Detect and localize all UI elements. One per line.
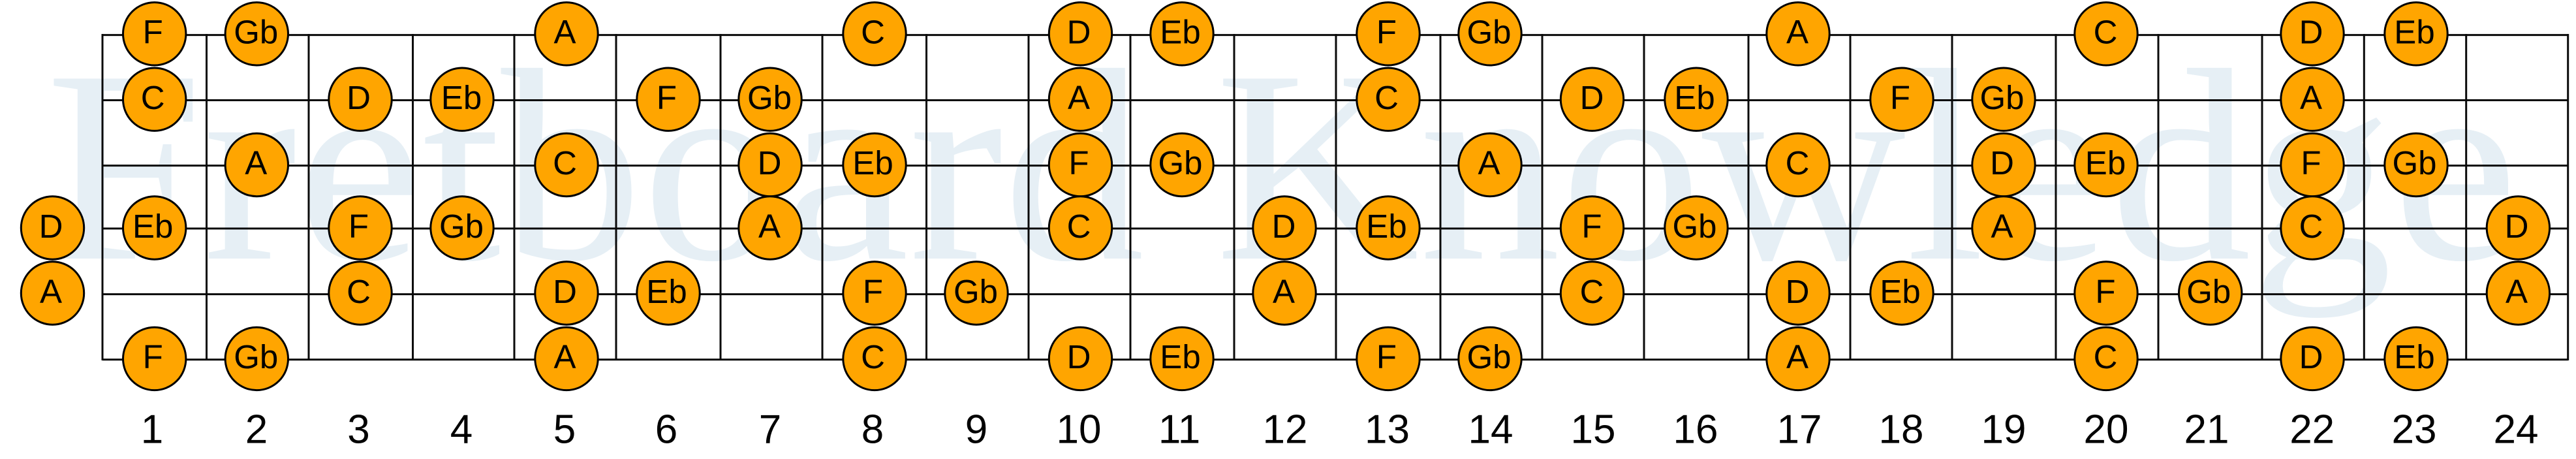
note F fret 22: F xyxy=(2301,144,2321,182)
note C fret 13 xyxy=(1357,68,1420,131)
note Gb fret 4: Gb xyxy=(439,208,484,245)
note F fret 1: F xyxy=(143,13,163,51)
note C fret 22 xyxy=(2281,197,2344,259)
note A fret 17 xyxy=(1767,327,1829,390)
fret numbers: 19 xyxy=(1981,407,2026,452)
note Gb fret 23: Gb xyxy=(2392,144,2437,182)
note A fret 22: A xyxy=(2300,79,2322,116)
fret numbers: 16 xyxy=(1673,407,1718,452)
note C fret 15: C xyxy=(1580,273,1604,310)
note Eb fret 23: Eb xyxy=(2394,338,2435,375)
note C fret 10 xyxy=(1049,197,1112,259)
note A fret 17: A xyxy=(1786,338,1808,375)
watermark: Fretboard Knowledge: Fretboard Knowledge xyxy=(46,14,2518,319)
note Gb fret 16: Gb xyxy=(1672,208,1717,245)
note Gb fret 11: Gb xyxy=(1158,144,1203,182)
note F fret 18 xyxy=(1870,68,1933,131)
note Eb fret 23: Eb xyxy=(2394,13,2435,51)
note D fret 19: D xyxy=(1990,144,2014,182)
fret numbers: 15 xyxy=(1571,407,1615,452)
note C fret 20: C xyxy=(2094,338,2117,375)
notes: string 5 xyxy=(21,262,2550,324)
note D fret 24: D xyxy=(2505,208,2528,245)
fret numbers: 4 xyxy=(450,407,473,452)
note Eb fret 23 xyxy=(2385,3,2447,65)
fret numbers: 3 xyxy=(347,407,370,452)
note A fret 24: A xyxy=(2506,273,2528,310)
note Eb fret 6 xyxy=(637,262,700,324)
note Eb fret 13 xyxy=(1357,197,1420,259)
note A fret 17: A xyxy=(1786,13,1808,51)
note A fret 7: A xyxy=(758,208,781,245)
note D fret 7: D xyxy=(758,144,781,182)
note Gb fret 2 xyxy=(225,327,288,390)
note Eb fret 6: Eb xyxy=(646,273,687,310)
note F fret 20: F xyxy=(2095,273,2116,310)
note Gb fret 14 xyxy=(1459,3,1521,65)
fret numbers: 24 xyxy=(2494,407,2538,452)
note F fret 8: F xyxy=(863,273,883,310)
note F fret 13 xyxy=(1357,3,1420,65)
note C fret 22: C xyxy=(2299,208,2323,245)
note D fret 10 xyxy=(1049,3,1112,65)
note A fret 12 xyxy=(1253,262,1316,324)
note Gb fret 21: Gb xyxy=(2186,273,2231,310)
note C fret 5 xyxy=(535,133,598,197)
note A open string: A xyxy=(40,273,62,310)
note F fret 10 xyxy=(1049,133,1112,197)
note F fret 8 xyxy=(843,262,906,324)
note Eb fret 8 xyxy=(843,133,906,197)
note A fret 5 xyxy=(535,3,598,65)
note Eb fret 18: Eb xyxy=(1880,273,1921,310)
note Eb fret 16: Eb xyxy=(1674,79,1715,116)
note Gb fret 14: Gb xyxy=(1466,13,1512,51)
note F fret 3 xyxy=(329,197,392,259)
note Gb fret 23 xyxy=(2385,133,2447,197)
note D fret 19 xyxy=(1972,133,2035,197)
note Eb fret 11 xyxy=(1151,327,1213,390)
note F fret 6 xyxy=(637,68,700,131)
note D fret 22: D xyxy=(2299,338,2323,375)
note C fret 17: C xyxy=(1786,144,1809,182)
note A fret 24 xyxy=(2487,262,2550,324)
fret numbers: 13 xyxy=(1365,407,1410,452)
fret numbers: 22 xyxy=(2289,407,2335,452)
note Gb fret 11 xyxy=(1151,133,1213,197)
note D fret 3 xyxy=(329,68,392,131)
note D fret 7 xyxy=(739,133,801,197)
fret numbers: 17 xyxy=(1777,407,1822,452)
fret numbers: 18 xyxy=(1879,407,1923,452)
notes: string 1 xyxy=(123,3,2447,65)
note Eb fret 1 xyxy=(123,197,186,259)
note C fret 3 xyxy=(329,262,392,324)
note Eb fret 16 xyxy=(1665,68,1728,131)
note F fret 13: F xyxy=(1376,338,1397,375)
fret numbers: 8 xyxy=(861,407,884,452)
note F fret 10: F xyxy=(1068,144,1089,182)
note Gb fret 2: Gb xyxy=(234,338,278,375)
note A fret 22 xyxy=(2281,68,2344,131)
notes: string 6 xyxy=(123,327,2447,390)
note D fret 5: D xyxy=(553,273,577,310)
fret numbers: 14 xyxy=(1468,407,1513,452)
note D fret 10: D xyxy=(1067,338,1091,375)
fret numbers: 9 xyxy=(965,407,987,452)
note A fret 10 xyxy=(1049,68,1112,131)
note D fret 12: D xyxy=(1272,208,1296,245)
note Gb fret 21 xyxy=(2179,262,2242,324)
note D fret 17 xyxy=(1767,262,1829,324)
note F fret 13: F xyxy=(1376,13,1397,51)
note Eb fret 20 xyxy=(2075,133,2137,197)
note C fret 1: C xyxy=(141,79,165,116)
note C fret 8 xyxy=(843,327,906,390)
note C fret 8: C xyxy=(861,338,885,375)
note C fret 17 xyxy=(1767,133,1829,197)
note F fret 13 xyxy=(1357,327,1420,390)
note Eb fret 4: Eb xyxy=(441,79,482,116)
note D fret 22: D xyxy=(2299,13,2323,51)
note F fret 1 xyxy=(123,3,186,65)
fret numbers: 12 xyxy=(1263,407,1307,452)
note C fret 3: C xyxy=(347,273,371,310)
fret numbers: 11 xyxy=(1158,407,1200,452)
fret numbers: 2 xyxy=(245,407,268,452)
note A fret 5: A xyxy=(553,338,576,375)
note Gb fret 14 xyxy=(1459,327,1521,390)
note Eb fret 11: Eb xyxy=(1160,338,1201,375)
note F fret 15: F xyxy=(1581,208,1602,245)
note F fret 20 xyxy=(2075,262,2137,324)
note D fret 3: D xyxy=(347,79,371,116)
note Gb fret 7: Gb xyxy=(747,79,792,116)
note Gb fret 4 xyxy=(431,197,493,259)
fret numbers: 6 xyxy=(655,407,677,452)
note C fret 20 xyxy=(2075,3,2137,65)
note Gb fret 2 xyxy=(225,3,288,65)
note Gb fret 9 xyxy=(945,262,1008,324)
note C fret 5: C xyxy=(553,144,577,182)
note Eb fret 13: Eb xyxy=(1366,208,1407,245)
note A fret 17 xyxy=(1767,3,1829,65)
note A fret 5 xyxy=(535,327,598,390)
fret numbers: 5 xyxy=(553,407,576,452)
note A open string xyxy=(21,262,84,324)
note D fret 10: D xyxy=(1067,13,1091,51)
note Eb fret 20: Eb xyxy=(2085,144,2126,182)
note A fret 19: A xyxy=(1991,208,2013,245)
note Gb fret 7 xyxy=(739,68,801,131)
note F fret 3: F xyxy=(349,208,369,245)
note Eb fret 23 xyxy=(2385,327,2447,390)
note D fret 22 xyxy=(2281,3,2344,65)
note A fret 14 xyxy=(1459,133,1521,197)
note D fret 12 xyxy=(1253,197,1316,259)
note C fret 15 xyxy=(1560,262,1624,324)
note Gb fret 16 xyxy=(1665,197,1728,259)
fret numbers: 10 xyxy=(1057,407,1101,452)
note F fret 15 xyxy=(1560,197,1624,259)
note A fret 7 xyxy=(739,197,801,259)
note D fret 22 xyxy=(2281,327,2344,390)
note Eb fret 11 xyxy=(1151,3,1213,65)
fret numbers: 7 xyxy=(759,407,781,452)
note A fret 19 xyxy=(1972,197,2035,259)
note A fret 2: A xyxy=(245,144,267,182)
note Eb fret 11: Eb xyxy=(1160,13,1201,51)
note F fret 1 xyxy=(123,327,186,390)
note C fret 10: C xyxy=(1067,208,1091,245)
note D fret 15: D xyxy=(1580,79,1604,116)
fret numbers xyxy=(141,407,2538,452)
note C fret 20 xyxy=(2075,327,2137,390)
note Gb fret 19 xyxy=(1972,68,2035,131)
note D fret 10 xyxy=(1049,327,1112,390)
note D fret 15 xyxy=(1560,68,1624,131)
note A fret 2 xyxy=(225,133,288,197)
note F fret 18: F xyxy=(1890,79,1910,116)
note Eb fret 8: Eb xyxy=(852,144,893,182)
note C fret 1 xyxy=(123,68,186,131)
notes: string 3 xyxy=(225,133,2447,197)
fret numbers: 20 xyxy=(2084,407,2128,452)
note F fret 22 xyxy=(2281,133,2344,197)
note A fret 12: A xyxy=(1273,273,1295,310)
note Eb fret 18 xyxy=(1870,262,1933,324)
note Eb fret 1: Eb xyxy=(132,208,173,245)
notes: string 4 xyxy=(21,197,2550,259)
notes: string 2 xyxy=(123,68,2344,131)
note F fret 1: F xyxy=(143,338,163,375)
note D fret 5 xyxy=(535,262,598,324)
note Gb fret 2: Gb xyxy=(234,13,278,51)
note Gb fret 19: Gb xyxy=(1979,79,2025,116)
note D open string: D xyxy=(39,208,63,245)
fret numbers: 21 xyxy=(2184,407,2229,452)
fret numbers: 23 xyxy=(2392,407,2436,452)
note D open string xyxy=(21,197,84,259)
note Gb fret 14: Gb xyxy=(1466,338,1512,375)
fret numbers: 1 xyxy=(141,407,163,452)
note F fret 6: F xyxy=(657,79,677,116)
note D fret 17: D xyxy=(1786,273,1809,310)
note C fret 20: C xyxy=(2094,13,2117,51)
note A fret 10: A xyxy=(1068,79,1090,116)
note D fret 24 xyxy=(2487,197,2550,259)
note C fret 8: C xyxy=(861,13,885,51)
note Gb fret 9: Gb xyxy=(954,273,998,310)
note A fret 14: A xyxy=(1478,144,1500,182)
note A fret 5: A xyxy=(553,13,576,51)
note C fret 8 xyxy=(843,3,906,65)
note Eb fret 4 xyxy=(431,68,493,131)
note C fret 13: C xyxy=(1374,79,1399,116)
strings and frets grid xyxy=(102,34,2568,360)
